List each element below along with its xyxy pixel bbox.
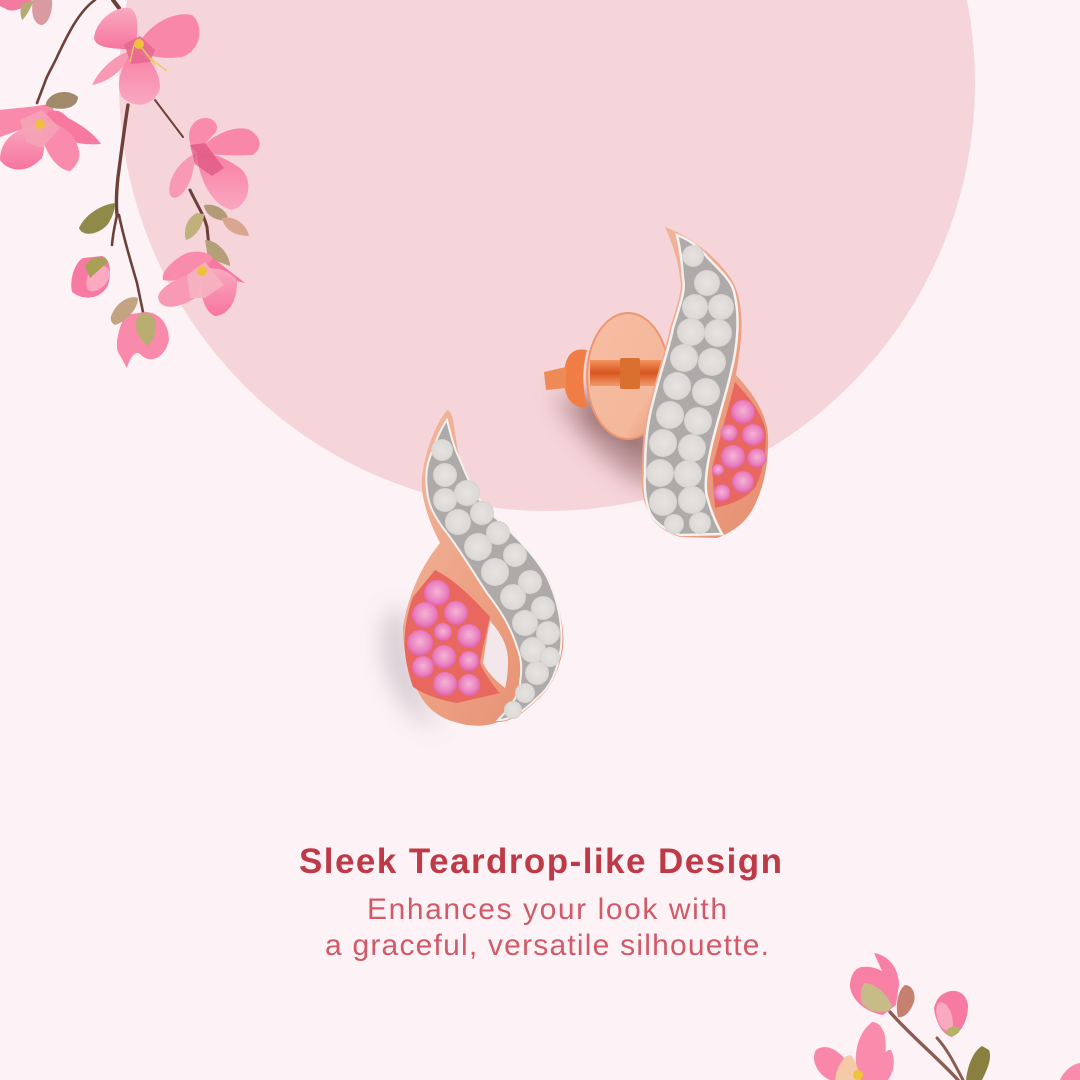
subtext: a graceful, versatile silhouette.: [325, 929, 769, 962]
teardrop opening: [483, 621, 508, 688]
post: [590, 360, 665, 386]
heading: Sleek Teardrop-like Design: [299, 842, 782, 881]
back disc: [587, 313, 669, 439]
pink inset: [712, 382, 766, 508]
diamonds: [431, 439, 560, 719]
diamonds: [646, 245, 734, 534]
flower: lower right: [158, 252, 245, 316]
branch: bottom-right cherry blossoms: [814, 953, 1080, 1080]
bud: right: [934, 991, 968, 1037]
petal fragment: [1060, 1063, 1080, 1080]
bud: left: [71, 256, 110, 298]
subtext: [325, 893, 769, 962]
leaf bud: [79, 203, 115, 234]
diamond band: [426, 420, 561, 720]
shadow: [384, 610, 440, 730]
pink inset: [404, 570, 500, 703]
pink stones: [712, 400, 766, 502]
gold frame: [642, 227, 768, 538]
stems: [37, 0, 210, 312]
top-left corner flower fragment: [0, 0, 52, 25]
flower: bottom: [814, 1022, 894, 1080]
bud: small side: [897, 985, 915, 1017]
pink circle backdrop: [119, 0, 975, 511]
thread: [544, 367, 566, 390]
bud: bottom: [111, 297, 169, 368]
branch: top-left cherry blossoms: [0, 0, 260, 368]
earring: front view: [384, 410, 563, 730]
diamond band: [645, 235, 738, 535]
subtext: Enhances your look with: [367, 893, 727, 926]
bud: large: [850, 953, 899, 1015]
nut: [564, 349, 588, 408]
flower: top: [92, 8, 199, 105]
leaf: [966, 1046, 990, 1080]
earring: back view with screw post: [544, 227, 768, 538]
pink stones: [407, 580, 481, 696]
buds on right branch: [185, 205, 249, 266]
flower: right: [169, 118, 260, 210]
shadow: [555, 390, 665, 490]
stems: [890, 1012, 963, 1080]
flower: left: [0, 92, 101, 171]
gold frame: [403, 410, 563, 726]
